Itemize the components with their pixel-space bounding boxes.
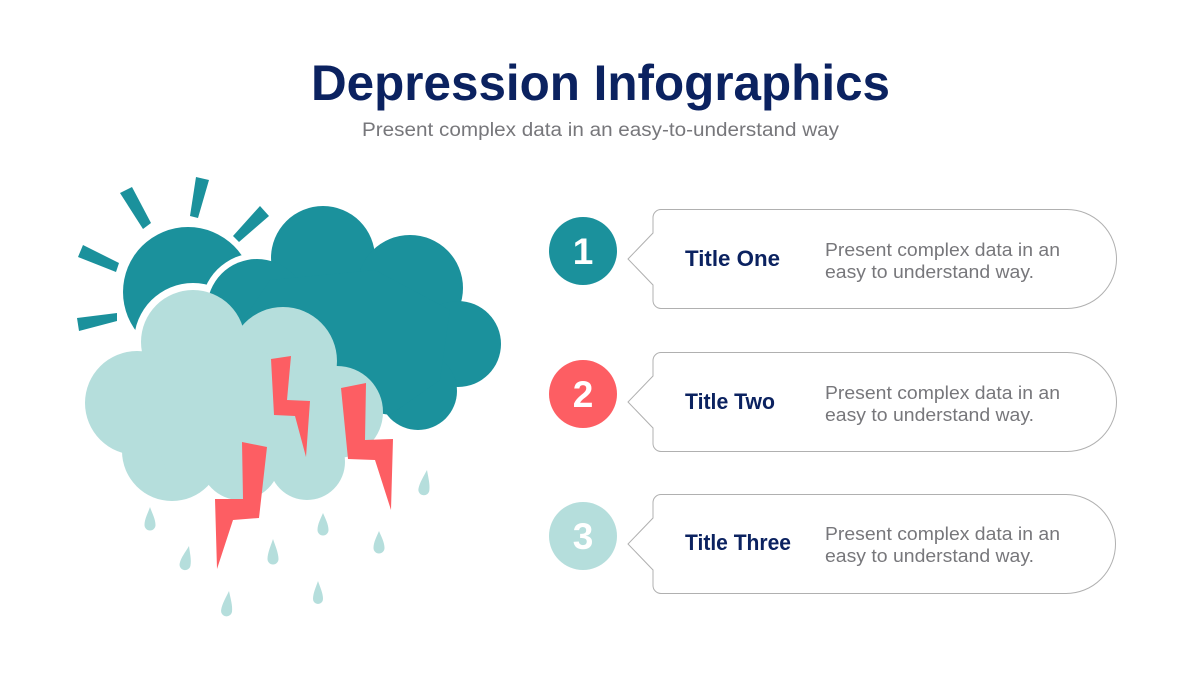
number badge 3: 3 — [573, 516, 593, 557]
icon: sun — [123, 227, 253, 357]
item 2 description: easy to understand way. — [825, 405, 1034, 425]
number badge 1: 1 — [573, 231, 593, 272]
white halo separating the clouds from the sun — [78, 200, 381, 462]
icon: sun rays — [77, 177, 269, 331]
item 2 — [549, 352, 1116, 452]
item 3 title: Title Three — [685, 530, 791, 555]
callout 3 — [628, 494, 1116, 594]
icon: light cloud — [85, 290, 383, 501]
number badge 1 — [549, 217, 617, 285]
callout 1 — [628, 210, 1116, 308]
subtitle: Present complex data in an easy-to-understand way — [362, 120, 840, 141]
title: Depression Infographics — [311, 55, 890, 111]
icon: dark cloud — [207, 206, 501, 430]
illustration: storm clouds with sun — [77, 177, 501, 617]
item 1 title: Title One — [685, 246, 780, 271]
item 3 — [549, 494, 1116, 594]
icon: lightning bolts — [215, 356, 393, 569]
item 1 description: easy to understand way. — [825, 262, 1034, 282]
number badge 3 — [549, 502, 617, 570]
item 2 description: Present complex data in an — [825, 383, 1060, 403]
callout 2 — [628, 352, 1116, 452]
item 1 — [549, 210, 1116, 308]
icon: rain drops — [144, 469, 432, 617]
item 2 title: Title Two — [685, 389, 775, 414]
item 1 description: Present complex data in an — [825, 240, 1060, 260]
number badge 2 — [549, 360, 617, 428]
item 3 description: Present complex data in an — [825, 524, 1060, 544]
number badge 2: 2 — [573, 374, 593, 415]
item 3 description: easy to understand way. — [825, 546, 1034, 566]
